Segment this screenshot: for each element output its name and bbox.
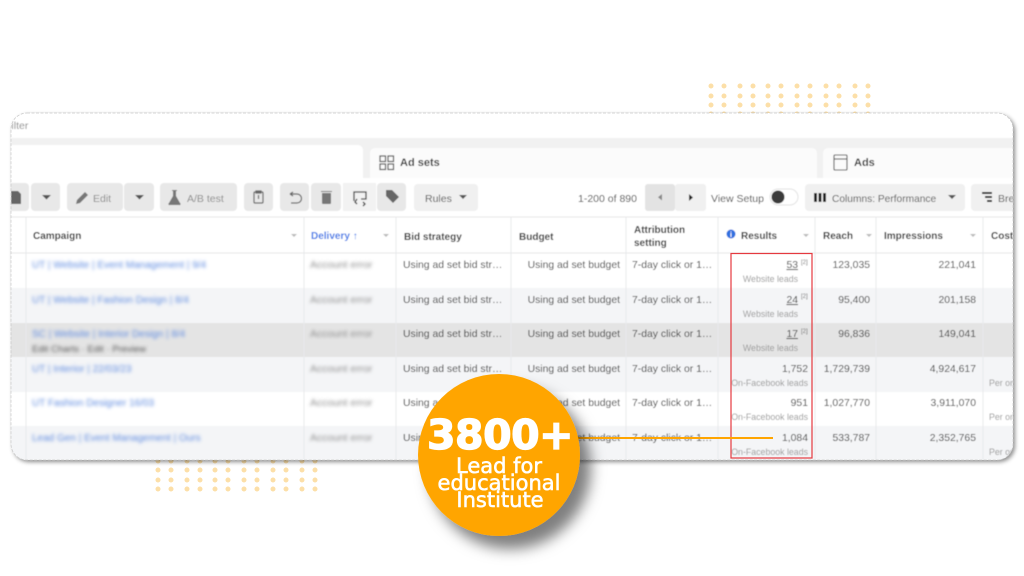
delivery status (blurred): Account error — [310, 260, 373, 271]
icon: ad sets grid — [380, 156, 394, 170]
table header: i — [730, 232, 732, 239]
budget column: Using ad set budget — [528, 329, 620, 340]
bid strategy column: Using ad set bid str… — [403, 295, 502, 306]
attribution column: 7-day click or 1… — [632, 364, 712, 375]
callout connector line — [560, 437, 773, 439]
bid strategy column: Using ad set bid str… — [403, 260, 502, 271]
results column — [731, 260, 809, 457]
dot pattern: bottom left — [156, 458, 318, 492]
icon: trash — [321, 191, 332, 204]
campaign names (blurred): UT | Website | Fashion Design | 8/4 — [32, 295, 189, 306]
results column: On-Facebook leads — [731, 447, 809, 457]
table header: Impressions — [884, 231, 943, 242]
toggle: view setup — [770, 189, 798, 205]
label: view setup: View Setup — [711, 193, 764, 205]
impressions column — [930, 260, 976, 444]
table header: Bid strategy — [404, 232, 462, 243]
icon: duplicate arrows — [354, 192, 366, 206]
icon: tag — [386, 190, 399, 203]
table header: Delivery ↑ — [311, 231, 358, 242]
badge caption: Institute — [456, 488, 544, 512]
cost per result column — [989, 379, 1013, 456]
budget column: Using ad set budget — [528, 260, 620, 271]
budget column — [528, 260, 620, 444]
impressions column: 3,911,070 — [931, 398, 976, 409]
browser address bar: Filter — [5, 120, 29, 132]
budget column: Using ad set budget — [528, 398, 620, 409]
results column: 1,084 — [782, 433, 808, 444]
impressions column: 149,041 — [938, 329, 976, 340]
table rows background — [0, 217, 1024, 460]
icon: breakdown — [982, 192, 992, 202]
reach column: 533,787 — [832, 433, 870, 444]
highlight box: results column — [731, 254, 812, 458]
icon: document — [11, 191, 21, 204]
card dashed edge — [11, 113, 1013, 460]
campaign names (blurred): UT Fashion Designer 16/03 — [32, 398, 155, 409]
data table — [0, 217, 1024, 460]
impressions column: 201,158 — [938, 295, 976, 306]
results column: Website leads — [743, 274, 799, 284]
table header: Attribution — [634, 225, 685, 236]
results column: [2] — [801, 260, 808, 266]
results column: On-Facebook leads — [731, 412, 809, 422]
table header: Budget — [519, 232, 554, 243]
table header: Reach — [823, 231, 853, 242]
toolbar — [11, 178, 1013, 212]
panel: ads manager screenshot card — [0, 113, 1024, 460]
results column: [2] — [801, 329, 808, 335]
reach column: 96,836 — [838, 329, 870, 340]
campaign names (blurred): Edit Charts · Edit · Preview — [32, 344, 146, 355]
tab label: ad sets: Ad sets — [400, 157, 440, 169]
button label: columns performance: Columns: Performance — [832, 194, 937, 205]
impressions column: 4,924,617 — [930, 364, 976, 375]
button label: rules: Rules — [425, 193, 452, 205]
icon: undo — [290, 192, 302, 203]
dot pattern: top right — [708, 84, 870, 116]
table header: Campaign — [33, 231, 81, 242]
bid strategy column: Using ad set bid str… — [403, 329, 502, 340]
campaign names (blurred) — [32, 260, 207, 444]
icon: clipboard — [254, 191, 263, 203]
budget column: Using ad set budget — [528, 433, 620, 444]
delivery status (blurred): Account error — [310, 295, 373, 306]
delivery status (blurred) — [310, 260, 373, 444]
campaign names (blurred): UT | Interior | 22/03/23 — [32, 364, 132, 375]
bid strategy column — [403, 260, 502, 444]
icon: pencil — [76, 192, 88, 204]
table header: Results — [741, 231, 778, 242]
table header — [33, 225, 1024, 249]
attribution column: 7-day click or 1… — [632, 295, 712, 306]
reach column: 1,729,739 — [824, 364, 870, 375]
badge caption — [438, 454, 560, 512]
delivery status (blurred): Account error — [310, 398, 373, 409]
delivery status (blurred): Account error — [310, 329, 373, 340]
results column: 17 — [786, 329, 798, 340]
results column: Website leads — [743, 309, 799, 319]
badge caption: educational — [438, 471, 560, 495]
attribution column — [632, 260, 712, 444]
bid strategy column: Using ad set bid str… — [403, 398, 502, 409]
results column: [2] — [801, 294, 808, 300]
budget column: Using ad set budget — [528, 295, 620, 306]
impressions column: 221,041 — [938, 260, 976, 271]
pagination count: 1-200 of 890 — [578, 193, 637, 205]
campaign names (blurred): UT | Website | Event Management | 9/4 — [32, 260, 207, 271]
browser address bar — [12, 121, 29, 130]
delivery status (blurred): Account error — [310, 433, 373, 444]
reach column: 123,035 — [832, 260, 870, 271]
results column: 1,752 — [782, 364, 808, 375]
table header: setting — [634, 238, 667, 249]
reach column: 95,400 — [838, 295, 870, 306]
badge caption: Lead for — [456, 454, 542, 478]
icon: dropdown carets — [42, 195, 956, 200]
delivery status (blurred): Account error — [310, 364, 373, 375]
attribution column: 7-day click or 1… — [632, 398, 712, 409]
reach column: 1,027,770 — [824, 398, 870, 409]
button label: edit: Edit — [93, 193, 111, 205]
icon: pagination arrows — [658, 194, 662, 200]
bid strategy column: Using ad set bid str… — [403, 364, 502, 375]
results column: Website leads — [743, 343, 799, 353]
button label: a/b test: A/B test — [187, 193, 224, 205]
attribution column: 7-day click or 1… — [632, 260, 712, 271]
impressions column: 2,352,765 — [930, 433, 976, 444]
callout badge: 3800+ leads — [418, 374, 580, 536]
reach column — [824, 260, 870, 444]
bid strategy column: Using ad set bid str… — [403, 433, 502, 444]
tab label: ads: Ads — [854, 157, 875, 169]
icon: columns — [814, 193, 826, 202]
badge number: 3800+ — [427, 411, 573, 459]
icon: flask — [168, 190, 181, 205]
campaign names (blurred): Lead Gen | Event Management | Ours — [32, 433, 201, 444]
campaign names (blurred): SC | Website | Interior Design | 8/4 — [32, 329, 186, 340]
icon: ads window — [834, 155, 847, 170]
tabs bar — [0, 138, 1013, 180]
results column: 24 — [786, 295, 798, 306]
results column: 951 — [791, 398, 808, 409]
budget column: Using ad set budget — [528, 364, 620, 375]
results column: On-Facebook leads — [731, 378, 809, 388]
attribution column: 7-day click or 1… — [632, 433, 712, 444]
attribution column: 7-day click or 1… — [632, 329, 712, 340]
results column: 53 — [786, 260, 798, 271]
